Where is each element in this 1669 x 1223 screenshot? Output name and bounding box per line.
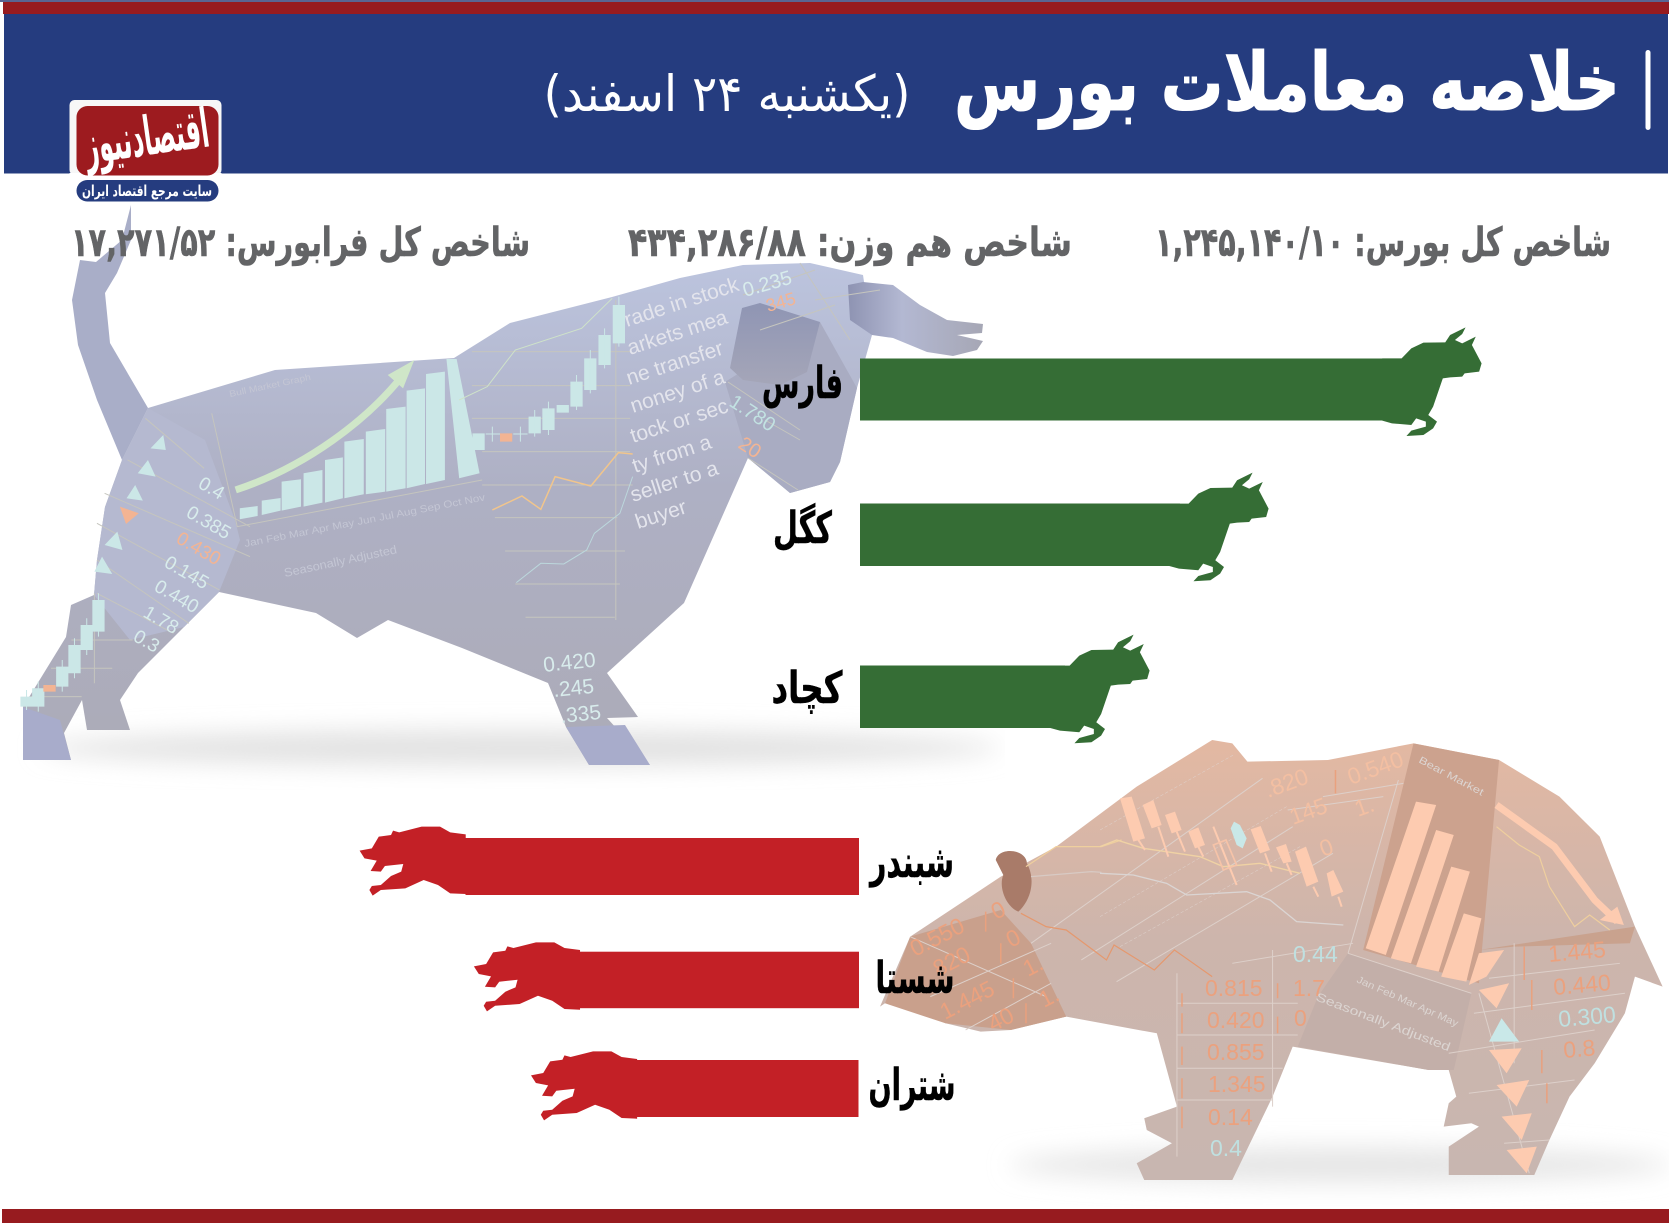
illustration: bull: 0.4: [195, 473, 228, 505]
header banner: [4, 14, 1668, 174]
illustration: bear: 0.4: [1210, 1135, 1242, 1161]
illustration: bull: tock or sec: [627, 395, 731, 448]
illustration: bear: 0.815: [1205, 975, 1263, 1001]
illustration: bear: 1.445: [1547, 936, 1607, 967]
illustration: bull: 0.145: [160, 552, 212, 594]
illustration: bear: 40: [983, 1002, 1018, 1036]
illustration: bull: 0.420: [542, 649, 597, 677]
illustration: bull: [20, 205, 1000, 766]
illustration: bull: seller to a: [627, 457, 721, 507]
illustration: bull: 0.440: [150, 576, 202, 618]
red bar: شبندر: [360, 827, 859, 896]
illustration: bull: 0.385: [182, 502, 234, 544]
logo: [70, 97, 222, 205]
illustration: bear: Bear Market: [1417, 755, 1486, 799]
index: equal weight: شاخص هم وزن: ۴۳۴,۲۸۶/۸۸: [628, 220, 1072, 266]
illustration: bull: .245: [552, 675, 595, 702]
index: farabourse: شاخص کل فرابورس: ۱۷,۲۷۱/۵۲: [71, 220, 530, 266]
label: شبندر: شبندر: [869, 837, 954, 888]
illustration: bear: 0.540: [1344, 746, 1407, 790]
illustration: bull: 20: [734, 433, 765, 463]
illustration: bull: 0.3: [130, 626, 163, 658]
illustration: bull: noney of a: [627, 365, 728, 418]
label: شستا: شستا: [876, 953, 954, 1004]
illustration: bear: 1.345: [1208, 1071, 1266, 1097]
label: شتران: شتران: [868, 1060, 956, 1111]
illustration: bear: 0.855: [1207, 1039, 1265, 1065]
illustration: bear: Jan Feb Mar Apr May: [1355, 975, 1460, 1029]
illustration: bear: 1.: [1034, 981, 1063, 1012]
illustration: bear: 0.440: [1552, 969, 1612, 1000]
illustration: bear: 0: [986, 895, 1010, 924]
illustration: bear: 0.44: [1293, 941, 1338, 967]
illustration: bull: 0.235: [740, 267, 795, 302]
illustration: bear: [880, 740, 1669, 1183]
red bar: شستا: [474, 942, 859, 1011]
illustration: bear: .820: [1261, 763, 1312, 803]
bottom red band: [2, 1209, 1669, 1223]
illustration: bear: 145: [1286, 792, 1331, 830]
illustration: bull: 345: [764, 288, 798, 316]
top thin line and red band: [0, 0, 1669, 14]
illustration: bull: ty from a: [629, 431, 715, 478]
illustration: bear: 0: [1316, 833, 1337, 862]
illustration: bull: arkets mea: [624, 306, 731, 360]
illustration: bear: 1.: [1018, 950, 1047, 981]
title bar mark: [1646, 50, 1650, 130]
illustration: bull: 0.430: [172, 528, 224, 570]
illustration: bull: 1.780: [725, 391, 779, 436]
illustration: bull: Jan Feb Mar Apr May Jun Jul Aug Sep Oct Nov: [243, 492, 486, 550]
red bar: شتران: [531, 1051, 858, 1120]
illustration: bull: .335: [559, 701, 602, 728]
green bar: کگل: [860, 473, 1269, 581]
illustration: bear: 0: [1294, 1005, 1307, 1031]
illustration: bull: 1.78: [140, 602, 182, 639]
illustration: bear: 0: [1001, 923, 1025, 952]
green bar: کچاد: [860, 635, 1150, 743]
text: اقتصادنیوز: [79, 97, 213, 177]
illustration: bull: Bull Market Graph: [228, 372, 312, 399]
illustration: bull: ne transfer: [623, 337, 726, 390]
illustration: bear: 0.420: [1207, 1007, 1265, 1033]
illustration: bear: 0.550: [905, 912, 969, 961]
subtitle date: (یکشنبه ۲۴ اسفند): [544, 65, 910, 123]
illustration: bear: Seasonally Adjusted: [1314, 990, 1452, 1054]
illustration: bull: Seasonally Adjusted: [283, 542, 398, 580]
illustration: bull: buyer: [632, 496, 690, 534]
label: کچاد: کچاد: [772, 663, 843, 714]
illustration: bear: 1.7: [1293, 975, 1325, 1001]
illustration: bear: 0.14: [1208, 1104, 1253, 1130]
illustration: bear: 820: [928, 941, 974, 981]
label: کگل: کگل: [773, 502, 832, 554]
label: فارس: فارس: [762, 358, 843, 409]
illustration: bear: 1.: [1351, 791, 1378, 822]
illustration: bear: 0.8: [1562, 1034, 1596, 1063]
green bar: فارس: [860, 327, 1482, 436]
illustration: bear: 1.445: [935, 975, 999, 1024]
illustration: bull: rade in stock: [621, 273, 742, 332]
illustration: bear: 0.300: [1557, 1001, 1617, 1032]
logo: سایت مرجع اقتصاد ایران: [82, 182, 212, 200]
